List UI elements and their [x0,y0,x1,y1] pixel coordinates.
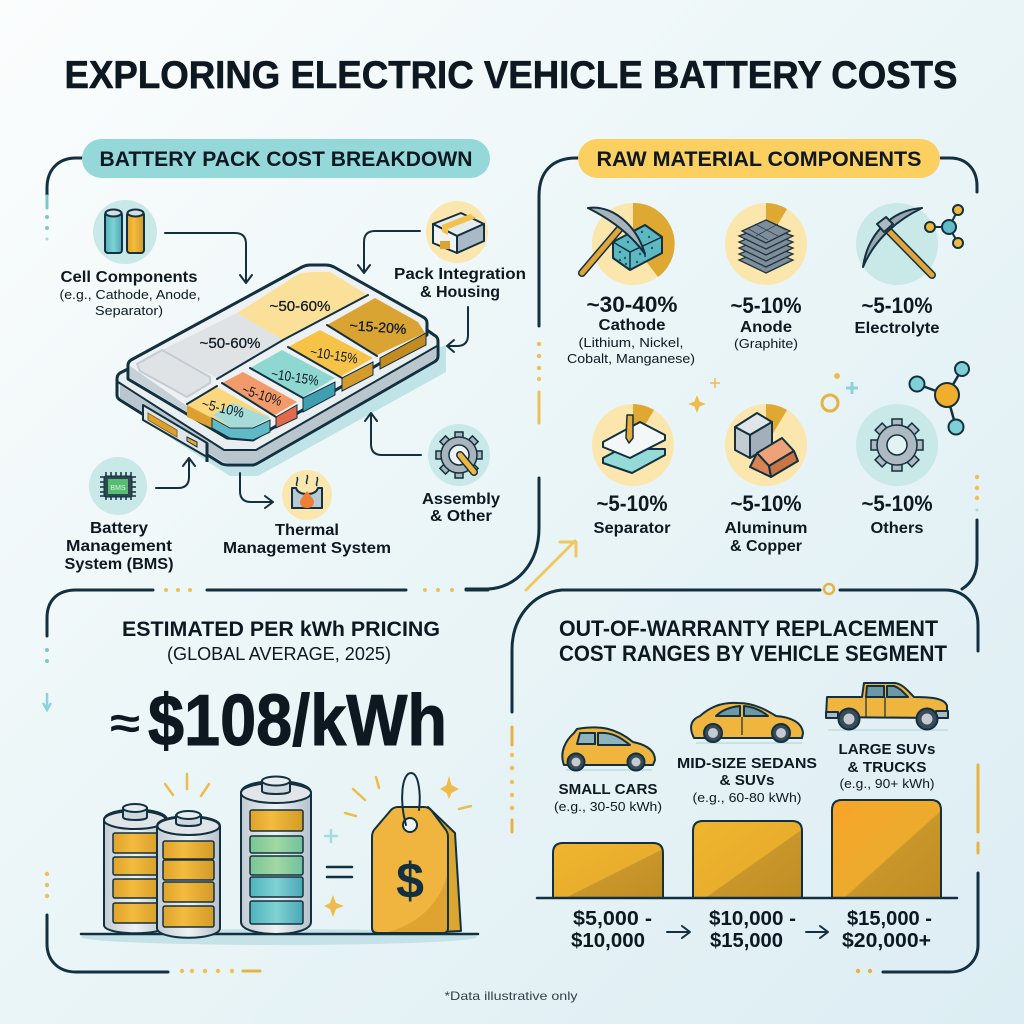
icon: thermal management [282,470,332,520]
label: thermal management system [223,522,391,557]
item: anode: ~5-10% [730,293,802,318]
heading: out-of-warranty replacement cost ranges: COST RANGES BY VEHICLE SEGMENT [559,641,948,666]
arrow: pack to thermal [240,473,273,508]
label: mid-size sedans and suvs: & SUVs [720,772,774,789]
label: pack integration and housing: Pack Integration [394,266,526,283]
battery pack illustration: ~5-10% [240,381,284,409]
label: mid-size sedans and suvs: (e.g., 60-80 kWh) [692,790,802,805]
icon: sedan [691,703,803,743]
icon: cell components [93,200,157,264]
heading: estimated per kWh pricing: ESTIMATED PER kWh PRICING [122,618,440,641]
battery pack illustration: ~10-15% [309,343,359,367]
price: mid-size: $10,000 - [709,908,796,930]
heading: raw material components [578,139,940,178]
item: electrolyte [854,203,963,337]
big price: ≈ [110,699,140,748]
price: large: $15,000 - [847,908,932,930]
item: cathode: (Lithium, Nickel, [578,335,684,350]
icon: pack integration [426,201,488,263]
footnote: *Data illustrative only [444,989,578,1003]
label: large suvs and trucks [838,741,936,791]
arrow: mid to large [806,926,828,938]
panel: battery pack cost breakdown [45,139,526,573]
label: cell components: (e.g., Cathode, Anode, [60,287,200,302]
item: others [856,404,938,537]
panel: raw material components [466,139,979,590]
price: large: $20,000+ [842,930,931,952]
arrow: gold connector [526,541,576,590]
arrow: pack integration to pack [358,231,420,273]
label: battery management system: Battery [90,520,148,537]
item: separator: Separator [594,520,670,537]
label: cell components: Cell Components [60,269,198,286]
item: anode: Anode [740,319,792,336]
panel: out-of-warranty replacement costs [512,584,978,973]
price: mid-size [709,908,796,952]
label: cell components: Separator) [95,303,163,318]
heading: out-of-warranty replacement cost ranges: OUT-OF-WARRANTY REPLACEMENT [559,616,939,641]
decorative sparkles [688,373,858,413]
heading: battery pack cost breakdown: BATTERY PACK COST BREAKDOWN [100,148,472,171]
icon: sparkle rays [165,774,471,917]
bar chart [537,800,957,898]
item: anode [725,203,807,351]
heading: estimated per kWh pricing: (GLOBAL AVERAGE, 2025) [167,644,391,664]
item: aluminum and copper: & Copper [730,538,802,555]
item: anode: (Graphite) [734,336,798,351]
label: pack integration and housing: & Housing [420,284,500,301]
label: large suvs and trucks: LARGE SUVs [838,741,936,758]
label: cell components [60,269,200,318]
icon: assembly and other [428,424,490,486]
label: thermal management system: Management System [223,540,391,557]
label: pack integration and housing [394,266,526,301]
label: assembly and other [422,491,500,525]
arrow: small to mid [667,926,690,938]
label: battery management system: Management [66,538,173,555]
item: aluminum and copper: Aluminum [724,520,808,537]
item: aluminum and copper: ~5-10% [730,491,802,516]
item: electrolyte: ~5-10% [862,293,932,318]
item: cathode: ~30-40% [586,292,678,317]
battery pack illustration: ~10-15% [270,365,320,389]
icon: battery management system chip: BMS [110,485,126,492]
label: mid-size sedans and suvs: MID-SIZE SEDANS [677,755,817,772]
item: cathode [567,203,695,366]
item: others: Others [870,520,924,537]
price: small cars [571,908,652,952]
price: large [842,908,932,952]
arrow: assembly to pack [365,413,421,455]
item: separator [592,404,674,537]
price: small cars: $5,000 - [573,908,652,930]
heading: raw material components: RAW MATERIAL COMPONENTS [596,148,922,171]
icon: battery management system chip [89,457,147,515]
icon: small gold batteries [104,804,220,938]
icon: small car [562,727,655,770]
icon: price tag: $ [396,853,424,909]
icon: molecule [910,362,969,434]
heading: estimated per kWh pricing [122,618,440,664]
icon: pickup truck [826,683,948,730]
battery pack illustration: ~50-60% [200,335,260,352]
arrow: housing to pack [447,307,468,352]
item: electrolyte: Electrolyte [854,320,940,337]
battery pack illustration: ~5-10% [200,395,246,421]
ground line [81,929,478,945]
price: small cars: $10,000 [571,930,645,952]
label: large suvs and trucks: (e.g., 90+ kWh) [840,776,934,791]
title: EXPLORING ELECTRIC VEHICLE BATTERY COSTS [64,54,958,97]
item: cathode: Cobalt, Manganese) [567,351,695,366]
price: mid-size: $15,000 [710,930,783,952]
heading: battery pack cost breakdown [82,139,490,178]
battery pack illustration: ~15-20% [349,317,407,337]
item: cathode: Cathode [598,317,666,334]
icon: price tag [372,773,461,933]
label: mid-size sedans and suvs [677,755,817,805]
label: assembly and other: Assembly [422,491,500,508]
label: small cars: SMALL CARS [558,781,658,798]
label: large suvs and trucks: & TRUCKS [848,759,926,776]
battery pack illustration [117,265,446,476]
heading: out-of-warranty replacement cost ranges [559,616,948,666]
label: thermal management system: Thermal [275,522,339,539]
item: separator: ~5-10% [596,491,668,516]
label: small cars: (e.g., 30-50 kWh) [554,799,662,814]
arrow: cell components to pack [165,233,252,283]
equals sign [327,867,352,877]
battery pack illustration: ~50-60% [270,298,330,315]
arrow: bms to pack [156,458,195,488]
label: battery management system: System (BMS) [64,556,174,573]
panel: estimated per kWh pricing [43,588,514,973]
label: assembly and other: & Other [430,508,492,525]
label: small cars [554,781,662,814]
label: battery management system [64,520,174,573]
item: others: ~5-10% [862,491,932,516]
icon: large multicolor battery [241,776,311,934]
big price: $108/kWh [148,681,447,761]
item: aluminum and copper [724,404,808,555]
